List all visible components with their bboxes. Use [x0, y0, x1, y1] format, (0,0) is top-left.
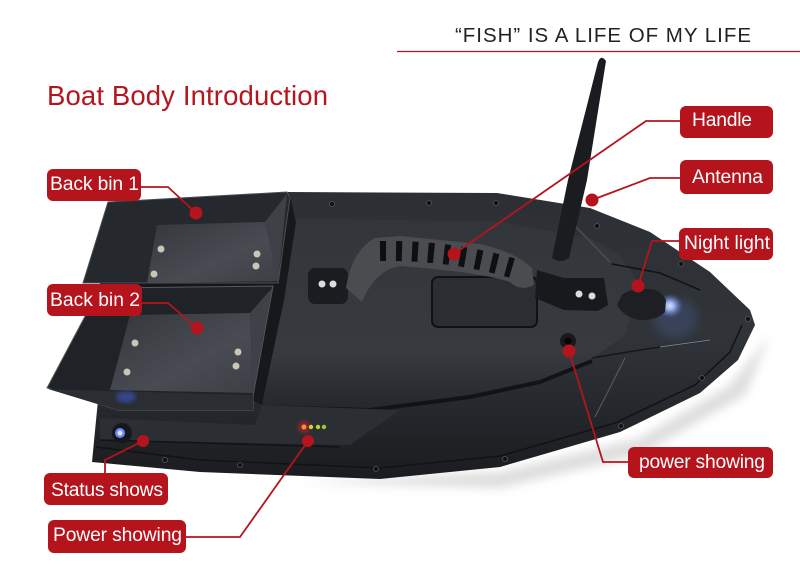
bin 2 — [47, 286, 273, 410]
raised deck — [262, 218, 640, 408]
boat — [47, 58, 770, 488]
callout: Back bin 2 — [47, 284, 204, 334]
rim screws — [162, 200, 750, 472]
hull rim line — [96, 325, 742, 468]
callout: Antenna: Antenna — [692, 167, 763, 188]
callout: power showing right: power showing — [639, 452, 765, 473]
callout: Antenna — [586, 160, 773, 206]
callout: Night light: Night light — [684, 233, 771, 254]
handle — [346, 236, 534, 302]
control strip — [100, 405, 400, 445]
power socket — [560, 333, 576, 349]
callout: Back bin 2: Back bin 2 — [50, 290, 140, 311]
header slogan: “FISH” IS A LIFE OF MY LIFE — [455, 24, 751, 47]
callout: Status shows: Status shows — [51, 480, 163, 501]
right handle mount — [535, 270, 608, 311]
boat shadow — [300, 335, 770, 488]
hull — [92, 192, 755, 479]
gap between bins — [100, 280, 280, 290]
left handle mount — [308, 268, 348, 304]
title: Boat Body Introduction — [47, 80, 328, 111]
gap shadow beside bins — [252, 195, 296, 405]
antenna — [552, 58, 606, 261]
deck dark edge — [262, 361, 592, 410]
bin 1 — [83, 192, 290, 283]
handle base plate — [432, 277, 537, 327]
switch icon — [112, 423, 132, 443]
night light — [617, 289, 697, 338]
callout: power showing right — [562, 344, 773, 478]
LED indicators — [298, 421, 326, 433]
callout: Night light — [632, 228, 773, 292]
callout: Handle — [448, 106, 773, 260]
callout: Back bin 1 — [47, 169, 202, 220]
callout: Power showing left — [48, 435, 314, 553]
callout: Handle: Handle — [692, 110, 752, 131]
callout: Power showing left: Power showing — [53, 525, 182, 546]
callout: Status shows — [44, 435, 168, 505]
callout: Back bin 1: Back bin 1 — [50, 174, 139, 195]
